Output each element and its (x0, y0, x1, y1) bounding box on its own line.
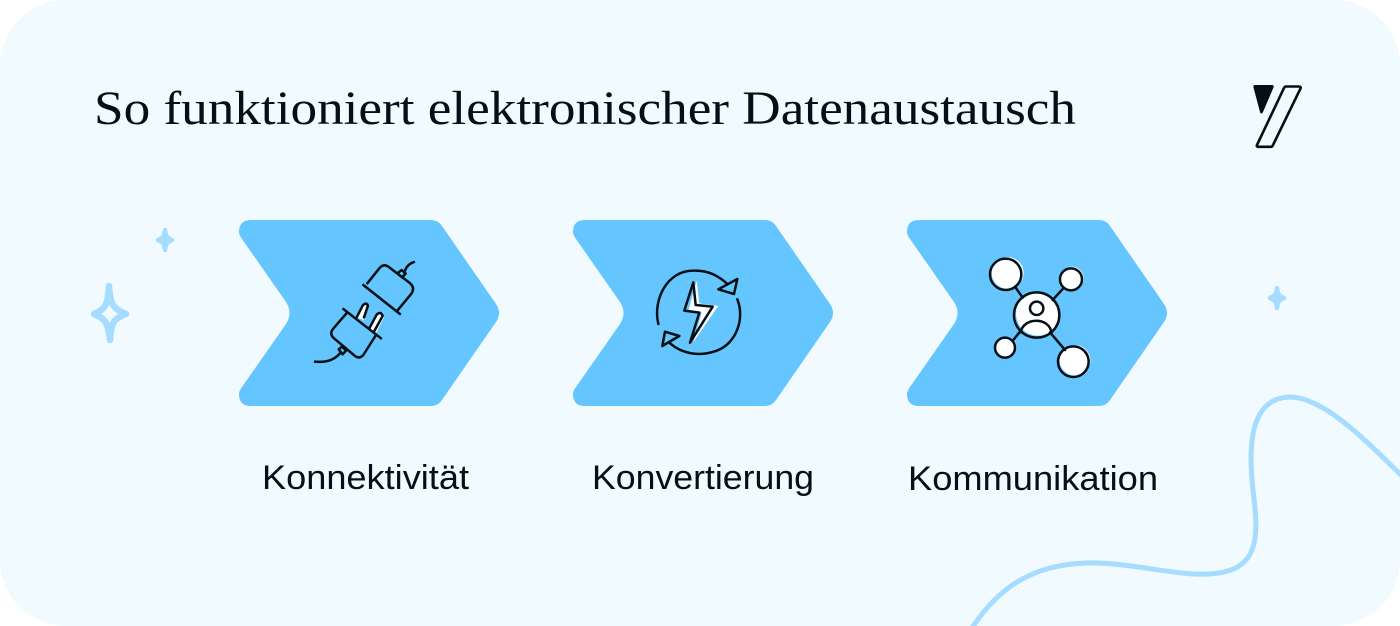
title: So funktioniert elektronischer Datenaustausch (94, 82, 1076, 135)
icon: large sparkle (94, 286, 126, 340)
label: Konnektivität: Konnektivität (262, 459, 470, 497)
decorative curve (972, 397, 1400, 626)
icon: small sparkle left (158, 230, 172, 250)
label: Kommunikation: Kommunikation (908, 460, 1158, 498)
chevron 3 (907, 220, 1167, 406)
label: Konvertierung: Konvertierung (592, 459, 814, 497)
step 2: conversion (573, 220, 833, 497)
icon: network (990, 257, 1090, 377)
step 1: connectivity (239, 220, 499, 497)
icon: plug (315, 262, 414, 362)
icon: logo (1253, 85, 1301, 147)
chevron 1 (239, 220, 499, 406)
icon: small sparkle right (1270, 288, 1284, 308)
step 3: communication (907, 220, 1167, 498)
icon: lightning cycle (657, 271, 740, 354)
chevron 2 (573, 220, 833, 406)
